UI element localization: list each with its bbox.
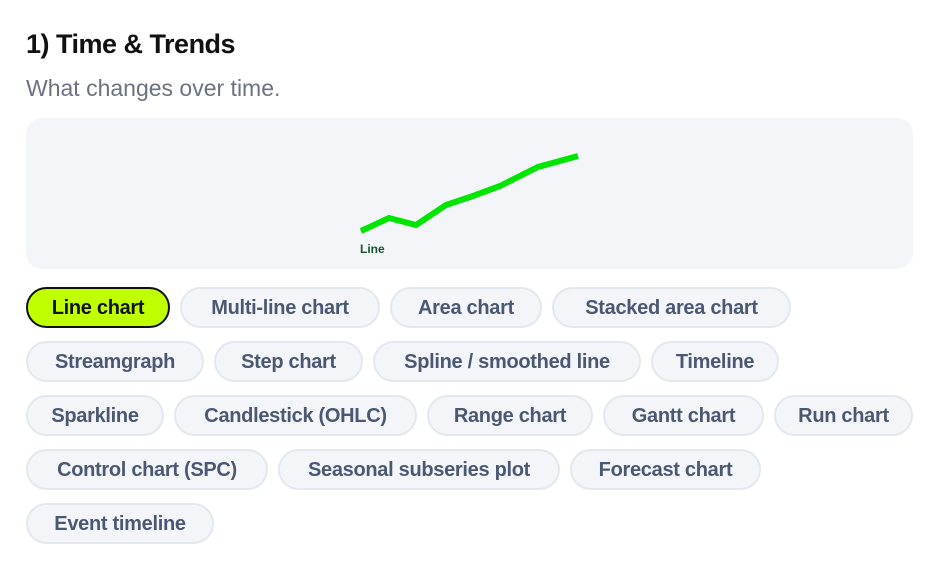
chip list: Candlestick (OHLC) bbox=[204, 405, 387, 427]
chip active: Line chart bbox=[52, 297, 144, 319]
title: 1) Time & Trends bbox=[26, 29, 235, 59]
chip list bbox=[26, 287, 913, 544]
chip list: Sparkline bbox=[51, 405, 139, 427]
chip active bbox=[26, 287, 170, 328]
chip list: Stacked area chart bbox=[585, 297, 758, 319]
panel: line chart preview bbox=[26, 118, 913, 269]
chip list: Control chart (SPC) bbox=[57, 459, 237, 481]
chip list: Spline / smoothed line bbox=[404, 351, 610, 373]
chip list: Run chart bbox=[798, 405, 889, 427]
chip list: Gantt chart bbox=[632, 405, 735, 427]
line chart: Line bbox=[360, 242, 385, 256]
chip list: Event timeline bbox=[54, 513, 186, 535]
chip list: Multi-line chart bbox=[211, 297, 349, 319]
chip list: Area chart bbox=[418, 297, 514, 319]
chip list: Timeline bbox=[676, 351, 754, 373]
subtitle: What changes over time. bbox=[26, 75, 280, 101]
chip list: Range chart bbox=[454, 405, 566, 427]
chip list: Seasonal subseries plot bbox=[308, 459, 530, 481]
chip list: Forecast chart bbox=[599, 459, 732, 481]
chip list: Streamgraph bbox=[55, 351, 175, 373]
chip list: Step chart bbox=[241, 351, 336, 373]
line chart bbox=[360, 156, 578, 256]
